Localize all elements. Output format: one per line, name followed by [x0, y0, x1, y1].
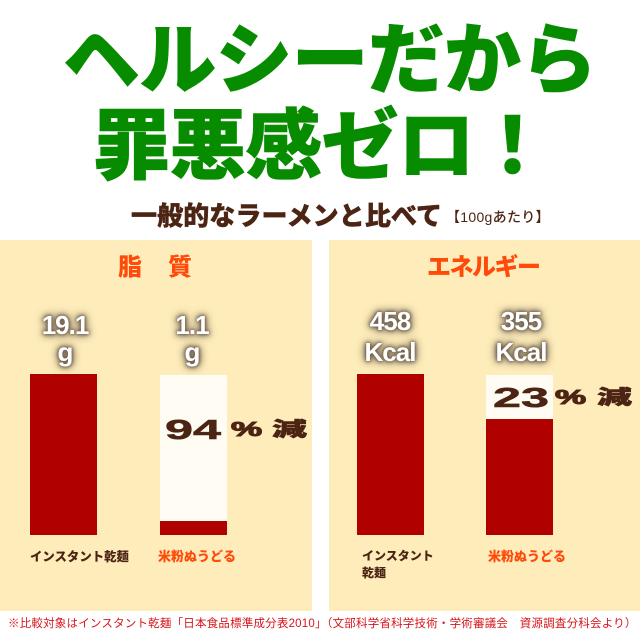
value: instant noodles energy: [358, 304, 423, 369]
value: instant noodles fat: [38, 309, 94, 374]
callout: 94 percent reduction: %: [231, 419, 262, 441]
value: instant noodles energy: 458: [370, 306, 410, 336]
panel heading: energy: エネルギー: [427, 254, 540, 281]
label: instant noodles: [362, 549, 434, 580]
value: instant noodles energy: Kcal: [365, 337, 415, 367]
panel: energy: [329, 240, 640, 611]
value: rice noodles energy: 355: [501, 306, 541, 336]
bar: instant noodles fat: [30, 374, 97, 535]
value: instant noodles fat: 19.1: [42, 310, 88, 340]
panel heading: fat: 脂 質: [118, 254, 192, 281]
label: instant noodles: インスタント乾麺: [30, 550, 129, 564]
callout: 23 percent reduction: [493, 382, 632, 413]
callout: 23 percent reduction: 減: [597, 387, 632, 409]
label: instant noodles: 乾麺: [362, 566, 386, 580]
bar: rice noodles energy: [486, 419, 553, 535]
subheading: 一般的なラーメンと比べて: [131, 201, 442, 231]
callout: 23 percent reduction: 23: [493, 382, 549, 413]
callout: 94 percent reduction: [165, 414, 308, 445]
label: rice noodles: 米粉ぬうどる: [488, 549, 566, 564]
bar: rice noodles fat: [160, 521, 227, 535]
value: rice noodles fat: [172, 310, 214, 374]
unit note: 【100gあたり】: [446, 209, 550, 225]
label: rice noodles: 米粉ぬうどる: [158, 549, 236, 564]
panel: fat: [0, 240, 312, 611]
value: instant noodles fat: g: [58, 337, 72, 367]
value: rice noodles fat: 1.1: [175, 310, 209, 340]
footnote: ※比較対象はインスタント乾麺「日本食品標準成分表2010」（文部科学省科学技術・学術審議会 資源調査分科会より）: [8, 618, 637, 630]
headline line 1: ヘルシーだから: [63, 18, 596, 104]
callout: 94 percent reduction: 94: [165, 414, 221, 445]
label: instant noodles: インスタント: [362, 549, 434, 563]
callout: 23 percent reduction: %: [555, 387, 586, 409]
bar: instant noodles energy: [357, 374, 424, 535]
headline line 2: 罪悪感ゼロ！: [93, 104, 550, 190]
bar: rice noodles fat remainder: [160, 375, 227, 521]
bar: rice noodles energy remainder: [486, 375, 553, 419]
value: rice noodles energy: [489, 304, 554, 369]
value: rice noodles energy: Kcal: [496, 337, 546, 367]
callout: 94 percent reduction: 減: [272, 419, 307, 441]
value: rice noodles fat: g: [185, 337, 199, 367]
